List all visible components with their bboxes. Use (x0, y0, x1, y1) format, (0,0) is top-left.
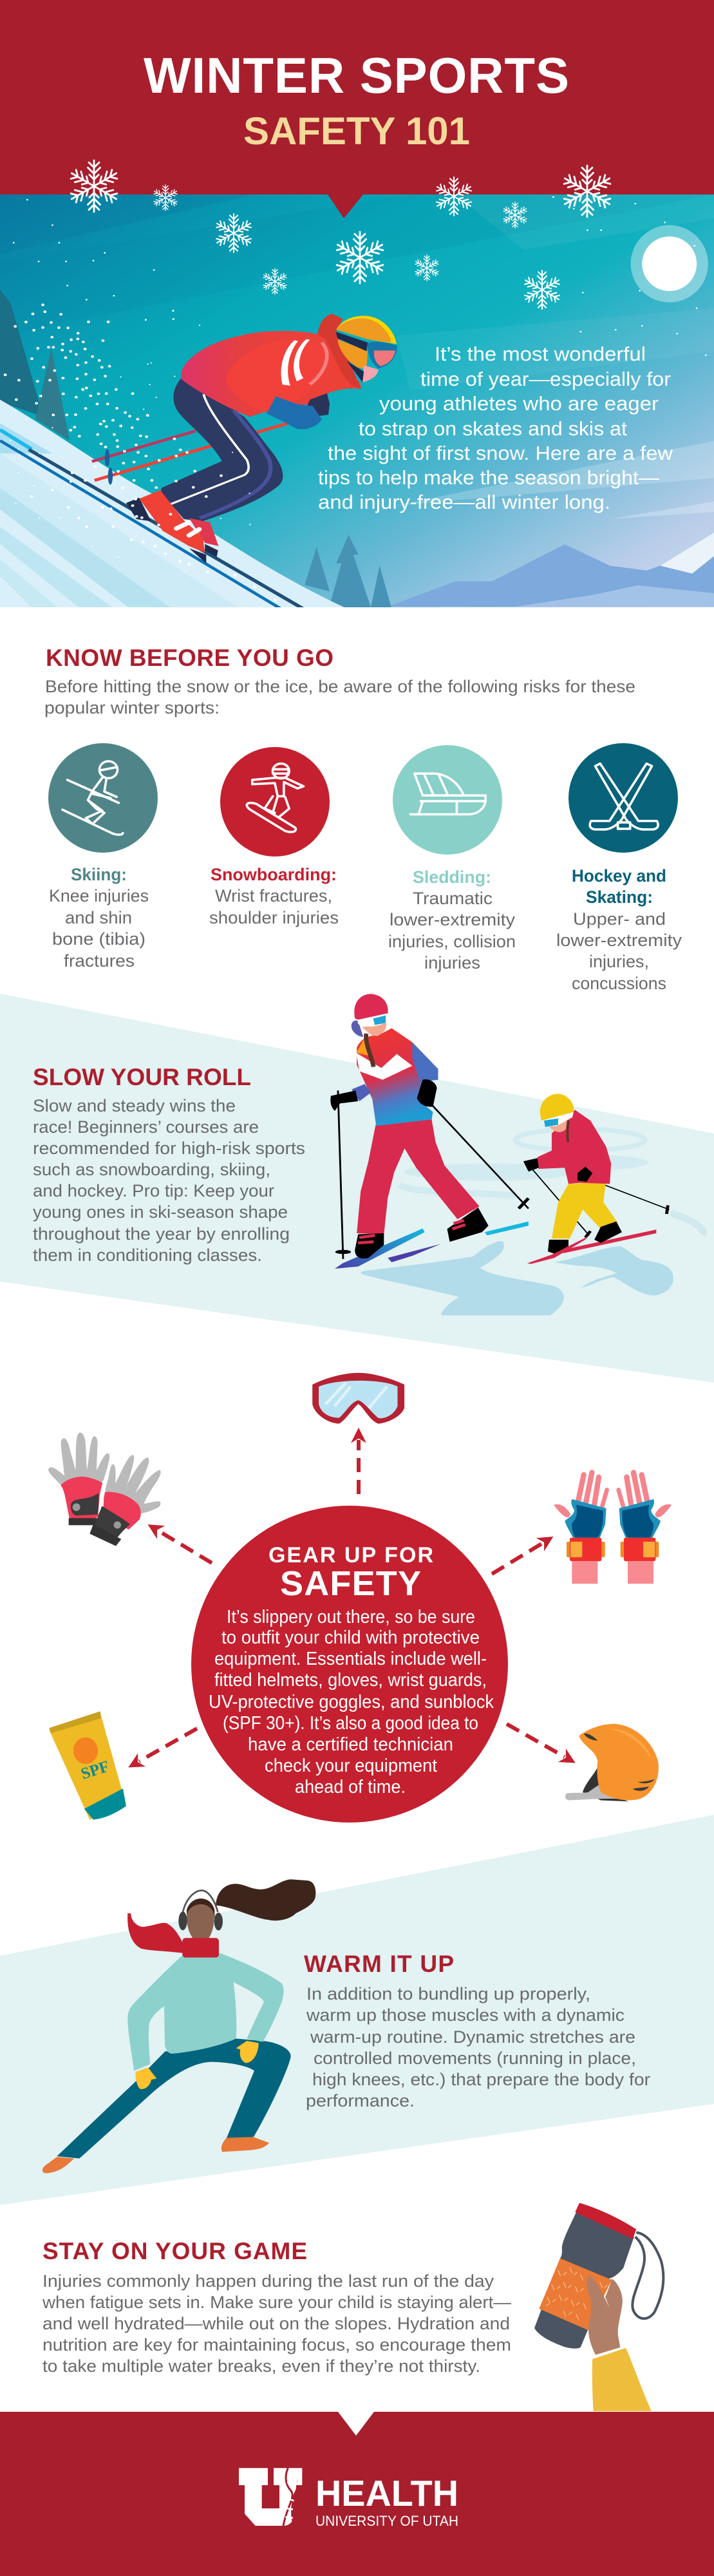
icon: sunscreen: SPF (79, 1757, 111, 1783)
risk label: snowboarding: shoulder injuries (209, 908, 339, 927)
snowflakes (69, 160, 612, 309)
heading: know before you go: KNOW BEFORE YOU GO (46, 645, 334, 671)
stay on your game text: to take multiple water breaks, even if they’re not thirsty. (42, 2356, 480, 2376)
panel: hero illustration (0, 194, 714, 610)
intro text: tips to help make the season bright— (318, 466, 659, 489)
risk label: sledding: Traumatic (413, 889, 493, 908)
icon: skiing (48, 743, 158, 853)
risk label: hockey and skating: concussions (572, 974, 666, 993)
slow your roll text: them in conditioning classes. (33, 1245, 262, 1265)
logo: university of utah health (239, 2468, 458, 2529)
child head (540, 1094, 574, 1142)
sky rays (0, 194, 714, 607)
risk label: skiing: and shin (65, 908, 132, 927)
gear panel: central circle: It’s slippery out there, so be sure (227, 1607, 475, 1627)
gear panel: central circle (191, 1506, 508, 1823)
child gloves and boots (523, 1158, 622, 1254)
slow your roll text: throughout the year by enrolling (33, 1224, 290, 1244)
risk label: skiing: fractures (64, 951, 135, 971)
child poles (531, 1168, 669, 1238)
risk label: hockey and skating: Upper- and (573, 909, 666, 929)
gear panel: central circle: to outfit your child with protective (221, 1627, 480, 1648)
icon: hockey and skating (568, 743, 678, 853)
warm it up text: high knees, etc.) that prepare the body for (312, 2070, 650, 2089)
gloves (267, 393, 330, 430)
shoes (42, 2137, 269, 2174)
scarf (127, 1913, 219, 1958)
risk label: sledding (388, 867, 516, 972)
helmet and goggles (335, 316, 397, 383)
warm it up text: warm-up routine. Dynamic stretches are (310, 2027, 635, 2047)
warm it up text: performance. (306, 2091, 415, 2110)
trees (0, 290, 392, 610)
risk label: sledding: injuries (424, 953, 480, 972)
risk label: snowboarding: Wrist fractures, (215, 886, 332, 905)
intro text: and injury-free—all winter long. (318, 491, 610, 513)
slow your roll text: such as snowboarding, skiing, (33, 1160, 270, 1179)
heading: warm it up: WARM IT UP (304, 1951, 454, 1977)
intro text: to strap on skates and skis at (359, 417, 627, 440)
distant mountains (387, 533, 714, 607)
boots (126, 490, 218, 564)
child jacket (538, 1110, 611, 1184)
heading: slow your roll: SLOW YOUR ROLL (33, 1064, 251, 1090)
slow your roll text: race! Beginners’ courses are (33, 1117, 259, 1137)
risk label: skiing: bone (tibia) (52, 929, 146, 949)
risk label: snowboarding (209, 865, 339, 927)
risk label: sledding: injuries, collision (388, 932, 516, 951)
icon: wrist guards (554, 1473, 672, 1584)
child pants (552, 1182, 617, 1238)
heading: stay on your game: STAY ON YOUR GAME (42, 2238, 307, 2264)
fine sky snow (10, 310, 250, 557)
slow your roll text: recommended for high-risk sports (33, 1139, 305, 1158)
hero sky (0, 194, 714, 607)
warm it up text: warm up those muscles with a dynamic (306, 2005, 625, 2025)
parent pants (357, 1119, 480, 1235)
intro text (318, 343, 673, 513)
icon: gloves (48, 1433, 161, 1546)
slow your roll text (33, 1096, 305, 1265)
skis (0, 430, 305, 610)
pants (161, 378, 283, 522)
slow your roll text: Slow and steady wins the (33, 1096, 236, 1115)
stay on your game text: and well hydrated—while out on the slopes. Hydration and (42, 2314, 510, 2333)
gear panel: central circle: SAFETY (280, 1564, 421, 1603)
risk label: sledding: lower-extremity (390, 910, 516, 929)
stay on your game text: when fatigue sets in. Make sure your child is staying alert— (42, 2293, 511, 2312)
title: SAFETY 101 (243, 109, 470, 153)
arrows to gear (139, 1440, 565, 1761)
risk label: sledding: Sledding: (413, 867, 491, 887)
parent head (352, 994, 388, 1067)
risk label: skiing: Skiing: (71, 865, 127, 884)
warm it up text (306, 1984, 650, 2110)
risk label: hockey and skating: injuries, (589, 952, 649, 971)
gear panel: central circle: GEAR UP FOR (268, 1543, 433, 1567)
gear panel: central circle: ahead of time. (295, 1777, 406, 1797)
gear panel: central circle: check your equipment (265, 1756, 437, 1776)
gear panel: central circle: UV-protective goggles, and sunblock (209, 1692, 494, 1712)
head and earmuffs (178, 1891, 223, 1938)
icon: sunscreen (49, 1711, 126, 1820)
title: WINTER SPORTS (144, 47, 569, 104)
stay on your game text: Injuries commonly happen during the last run of the day (42, 2271, 494, 2291)
slope (0, 400, 350, 610)
risk label: hockey and skating: lower-extremity (556, 931, 682, 950)
gear panel: central circle: equipment. Essentials include well- (214, 1649, 487, 1669)
intro text: the sight of first snow. Here are a few (328, 442, 673, 464)
gear panel: central circle: fitted helmets, gloves, wrist guards, (214, 1670, 487, 1690)
slow your roll text: and hockey. Pro tip: Keep your (33, 1181, 274, 1200)
risk label: skiing: Knee injuries (49, 886, 149, 905)
gear panel: central circle: (SPF 30+). It’s also a good idea to (223, 1713, 478, 1734)
poles (92, 423, 288, 485)
slow your roll text: young ones in ski-season shape (33, 1202, 288, 1222)
icon: helmet (565, 1724, 659, 1801)
intro text: time of year—especially for (420, 368, 671, 390)
mittens (136, 2041, 259, 2089)
icon: goggles (312, 1373, 404, 1424)
title (144, 47, 569, 153)
warm it up text: controlled movements (running in place, (314, 2049, 636, 2068)
footer banner (0, 2412, 714, 2576)
skier and slope (0, 290, 397, 610)
risk label: skiing (49, 865, 149, 971)
sweater (127, 1953, 284, 2070)
parent skis (335, 1222, 529, 1269)
intro paragraph (44, 677, 635, 717)
ponytail (216, 1879, 315, 1920)
illustration: woman stretching (42, 1879, 315, 2174)
intro paragraph: Before hitting the snow or the ice, be aware of the following risks for these (45, 677, 635, 696)
risk label: hockey and skating: Hockey and (572, 866, 666, 886)
risk label: hockey and skating: Skating: (586, 887, 653, 907)
risk label: hockey and skating (556, 866, 682, 993)
icon: snowboarding (220, 747, 330, 857)
panel: slow your roll band (0, 994, 714, 1383)
logo: university of utah health: HEALTH (315, 2473, 458, 2514)
panel: warm it up band (0, 1815, 714, 2205)
stay on your game text (42, 2271, 511, 2376)
risk label: snowboarding: Snowboarding: (211, 865, 337, 884)
snow spray (5, 305, 276, 600)
illustration: parent and child skiing (330, 994, 703, 1314)
moon (631, 225, 708, 303)
child skis (527, 1229, 656, 1264)
parent jacket (352, 1028, 438, 1126)
gear panel: central circle: have a certified technician (248, 1734, 453, 1755)
parent poles (335, 1090, 529, 1259)
intro text: young athletes who are eager (379, 392, 659, 415)
intro paragraph: popular winter sports: (44, 698, 220, 717)
icon: sledding (393, 745, 502, 855)
jacket (182, 314, 361, 417)
fine snow across sky (14, 197, 706, 384)
warm it up text: In addition to bundling up properly, (306, 1984, 590, 2003)
illustration: hand with water bottle (534, 2203, 663, 2411)
snow shadows (363, 1129, 703, 1314)
stay on your game text: nutrition are key for maintaining focus, so encourage them (42, 2335, 511, 2354)
pants (57, 2038, 291, 2159)
logo: university of utah health: UNIVERSITY OF UTAH (315, 2513, 458, 2529)
parent gloves and boots (330, 1079, 489, 1258)
intro text: It’s the most wonderful (435, 343, 646, 365)
header banner (0, 0, 714, 218)
